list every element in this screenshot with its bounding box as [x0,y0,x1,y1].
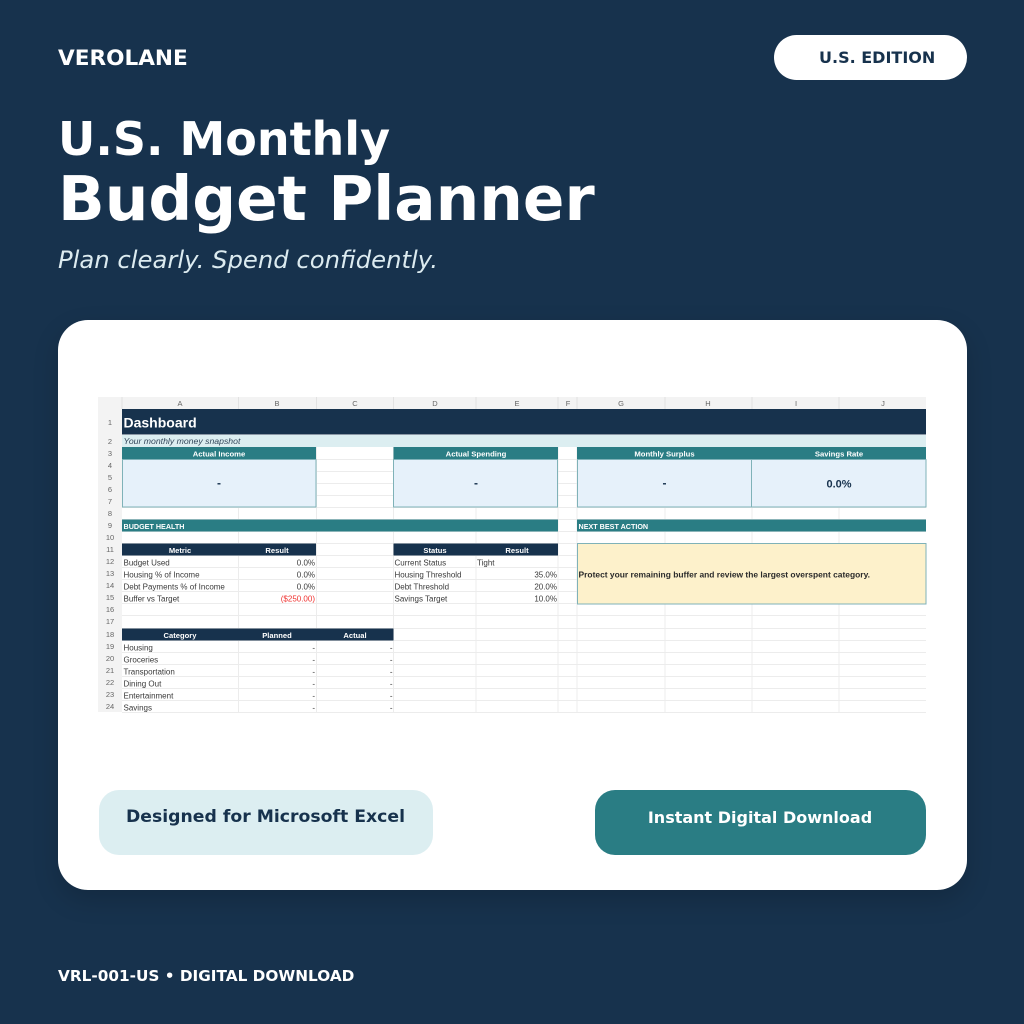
row header column: 13 [106,569,114,578]
row header column: 16 [106,605,114,614]
row header column: 11 [106,545,114,554]
column header row: H [705,399,711,408]
column header row: D [432,399,438,408]
subtitle bar [122,435,926,447]
table: categories: Transportation [124,668,175,676]
table: categories: Category [164,631,197,640]
brand name: VEROLANE [58,46,188,71]
KPI: savings rate [752,447,926,507]
budget health section bar: BUDGET HEALTH [124,522,184,531]
row header column: 1 [108,418,112,427]
row header column: 7 [108,497,112,506]
row header column: 10 [106,533,114,542]
table: categories: - [390,680,393,688]
table: budget health metrics: Metric [169,546,191,555]
table: budget health metrics: ($250.00) [281,594,315,604]
table: categories: - [390,656,393,664]
table: categories: - [390,692,393,700]
table: categories: Entertainment [124,692,174,700]
table: status thresholds: Current Status [394,558,446,568]
dashboard title bar [122,409,926,434]
table: categories: Housing [124,644,153,652]
column header row: C [352,399,358,408]
row header column: 9 [108,521,112,530]
table: budget health metrics: Debt Payments % of Income [124,582,225,592]
table: status thresholds [394,544,558,604]
column header row: A [177,399,183,408]
button label: Designed for Microsoft Excel [126,807,405,827]
next best action section bar [577,520,926,532]
dashboard title bar: Dashboard [124,414,197,430]
table: budget health metrics [122,544,316,604]
table: categories: - [312,668,315,676]
KPI: savings rate: 0.0% [826,478,852,490]
row header column: 3 [108,449,112,458]
row header column: 19 [106,642,114,651]
edition badge [774,35,967,80]
table: status thresholds: Housing Threshold [394,570,462,580]
row header column: 14 [106,581,114,590]
KPI: actual income: Actual Income [193,449,246,458]
table: categories: Actual [343,631,367,640]
row header column: 23 [106,690,114,699]
row header column: 15 [106,593,114,602]
row header column: 2 [108,437,112,446]
KPI: savings rate: Savings Rate [815,449,864,458]
table: budget health metrics: 0.0% [297,582,315,592]
row header column: 21 [106,666,114,675]
button: instant download [595,790,926,855]
column header row: G [618,399,624,408]
table: categories: - [312,644,315,652]
tagline: Plan clearly. Spend confidently. [58,245,438,274]
table: status thresholds: 10.0% [534,594,557,604]
row header column: 24 [106,702,114,711]
table: categories: - [390,668,393,676]
title line one: U.S. Monthly [58,112,390,166]
table: budget health metrics: Budget Used [124,558,170,568]
table: categories: Savings [124,704,152,712]
table: status thresholds: 35.0% [534,570,557,580]
table: categories: - [390,704,393,712]
KPI: monthly surplus: - [662,476,666,490]
table: status thresholds: Result [505,546,529,555]
subtitle bar: Your monthly money snapshot [124,436,241,446]
title line two: Budget Planner [58,164,595,235]
callout: next best action: Protect your remaining buffer and review the largest overspent category. [578,570,870,580]
KPI: actual spending: - [474,476,478,490]
table: status thresholds: Status [423,546,447,555]
button label: Instant Digital Download [648,808,872,827]
row header column: 5 [108,473,112,482]
KPI: monthly surplus [577,447,752,507]
KPI: actual spending: Actual Spending [446,449,507,458]
table: categories: - [312,692,315,700]
edition badge label: U.S. EDITION [819,48,935,67]
table: categories: - [312,680,315,688]
table: budget health metrics: 0.0% [297,558,315,568]
table: categories: - [312,704,315,712]
column header row: E [514,399,520,408]
table: categories: Planned [262,631,292,640]
KPI: actual income [122,447,316,507]
column header row: I [795,399,797,408]
row header column: 12 [106,557,114,566]
button: designed for Excel [99,790,433,855]
table: categories: Dining Out [124,680,162,688]
KPI: actual income: - [217,476,221,490]
column header row: B [274,399,280,408]
callout: next best action [578,544,926,604]
table: budget health metrics: Housing % of Income [124,570,200,580]
table: status thresholds: Tight [477,558,495,568]
row header column: 8 [108,509,112,518]
budget health section bar [122,520,558,532]
row header column: 4 [108,461,112,470]
row header column: 6 [108,485,112,494]
table: status thresholds: Savings Target [394,594,448,604]
column header row [98,397,926,409]
table: categories: - [390,644,393,652]
table: budget health metrics: Buffer vs Target [124,594,180,604]
row header column: 22 [106,678,114,687]
table: budget health metrics: 0.0% [297,570,315,580]
table: status thresholds: 20.0% [534,582,557,592]
column header row: J [881,399,885,408]
column header row: F [566,399,571,408]
next best action section bar: NEXT BEST ACTION [578,522,648,531]
row header column: 20 [106,654,114,663]
table: categories [122,628,394,712]
table: categories: - [312,656,315,664]
table: categories: Groceries [124,656,158,664]
row header column: 17 [106,617,114,626]
panel: product card [58,320,967,890]
table: budget health metrics: Result [265,546,289,555]
table: status thresholds: Debt Threshold [394,582,449,592]
footer code: VRL-001-US • DIGITAL DOWNLOAD [58,967,354,985]
row header column: 18 [106,630,114,639]
KPI: monthly surplus: Monthly Surplus [634,449,695,458]
KPI: actual spending [394,447,558,507]
row header column [98,409,122,712]
